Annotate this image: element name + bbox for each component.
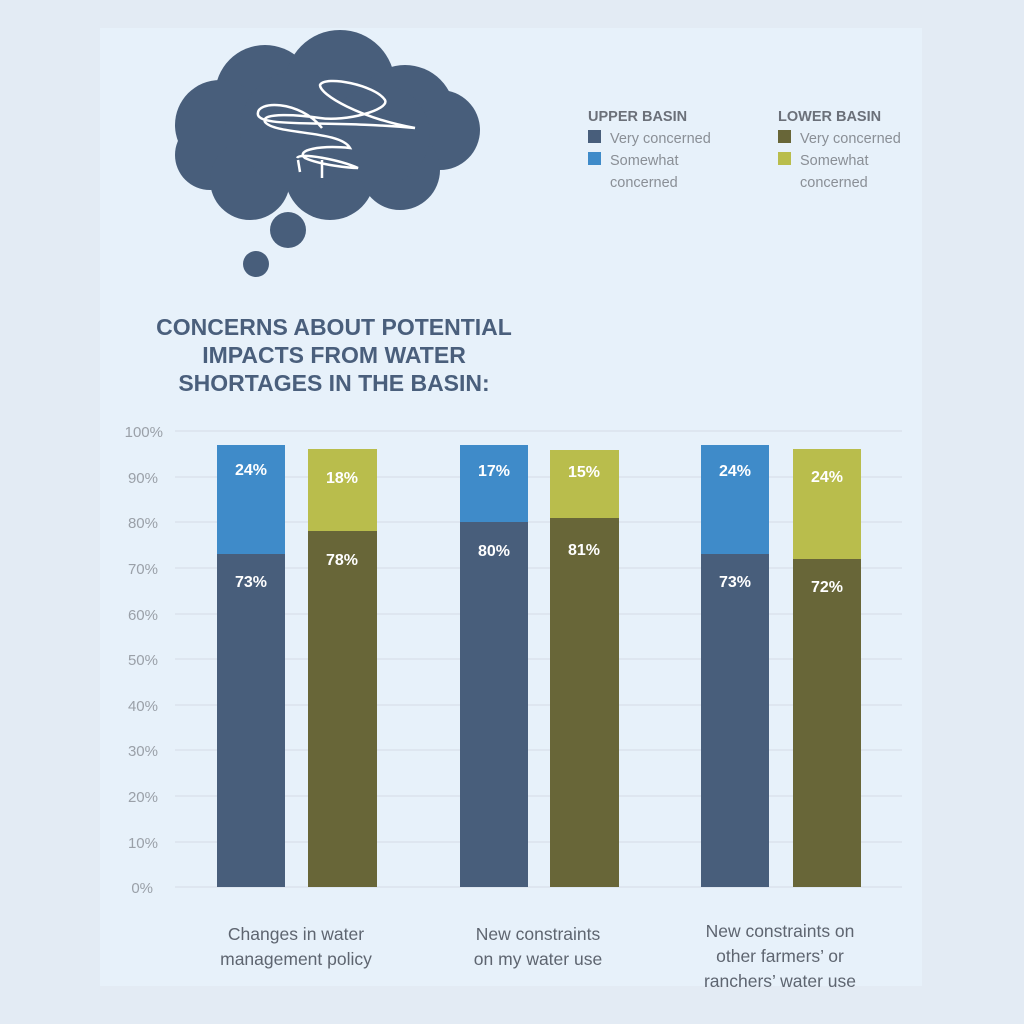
value labels: 24% bbox=[811, 469, 843, 486]
category labels: New constraints on bbox=[706, 921, 854, 941]
category labels: management policy bbox=[220, 949, 372, 969]
value labels: 15% bbox=[568, 464, 600, 481]
y axis labels: 20% bbox=[128, 789, 158, 806]
legend: UPPER BASIN bbox=[588, 109, 687, 125]
value labels: 24% bbox=[719, 463, 751, 480]
value labels: 18% bbox=[326, 470, 358, 487]
legend: Somewhat bbox=[610, 153, 679, 169]
icon: thought cloud bbox=[175, 30, 480, 277]
category labels: New constraints bbox=[476, 924, 600, 944]
value labels bbox=[235, 462, 843, 596]
legend: Somewhat bbox=[800, 153, 869, 169]
value labels: 81% bbox=[568, 542, 600, 559]
y axis labels: 80% bbox=[128, 515, 158, 532]
y axis labels bbox=[125, 424, 163, 897]
legend: LOWER BASIN bbox=[778, 109, 881, 125]
value labels: 73% bbox=[235, 574, 267, 591]
bar chart bbox=[125, 424, 902, 991]
title bbox=[156, 314, 512, 396]
y axis labels: 40% bbox=[128, 698, 158, 715]
legend: concerned bbox=[610, 175, 678, 191]
category labels: on my water use bbox=[474, 949, 602, 969]
category labels: Changes in water bbox=[228, 924, 364, 944]
category labels: other farmers’ or bbox=[716, 946, 844, 966]
y axis labels: 0% bbox=[131, 880, 153, 897]
value labels: 17% bbox=[478, 463, 510, 480]
y axis labels: 90% bbox=[128, 470, 158, 487]
value labels: 78% bbox=[326, 552, 358, 569]
value labels: 80% bbox=[478, 543, 510, 560]
value labels: 24% bbox=[235, 462, 267, 479]
y axis labels: 70% bbox=[128, 561, 158, 578]
value labels: 72% bbox=[811, 579, 843, 596]
y axis labels: 100% bbox=[125, 424, 163, 441]
bars bbox=[217, 445, 861, 887]
y axis labels: 10% bbox=[128, 835, 158, 852]
title: CONCERNS ABOUT POTENTIAL bbox=[156, 314, 512, 340]
legend: Very concerned bbox=[610, 131, 711, 147]
legend: concerned bbox=[800, 175, 868, 191]
legend: Very concerned bbox=[800, 131, 901, 147]
y axis labels: 50% bbox=[128, 652, 158, 669]
y axis labels: 60% bbox=[128, 607, 158, 624]
value labels: 73% bbox=[719, 574, 751, 591]
panel: background bbox=[100, 28, 922, 986]
legend bbox=[588, 109, 901, 191]
y axis labels: 30% bbox=[128, 743, 158, 760]
title: IMPACTS FROM WATER bbox=[202, 342, 466, 368]
title: SHORTAGES IN THE BASIN: bbox=[178, 370, 490, 396]
category labels bbox=[220, 921, 856, 991]
category labels: ranchers’ water use bbox=[704, 971, 856, 991]
